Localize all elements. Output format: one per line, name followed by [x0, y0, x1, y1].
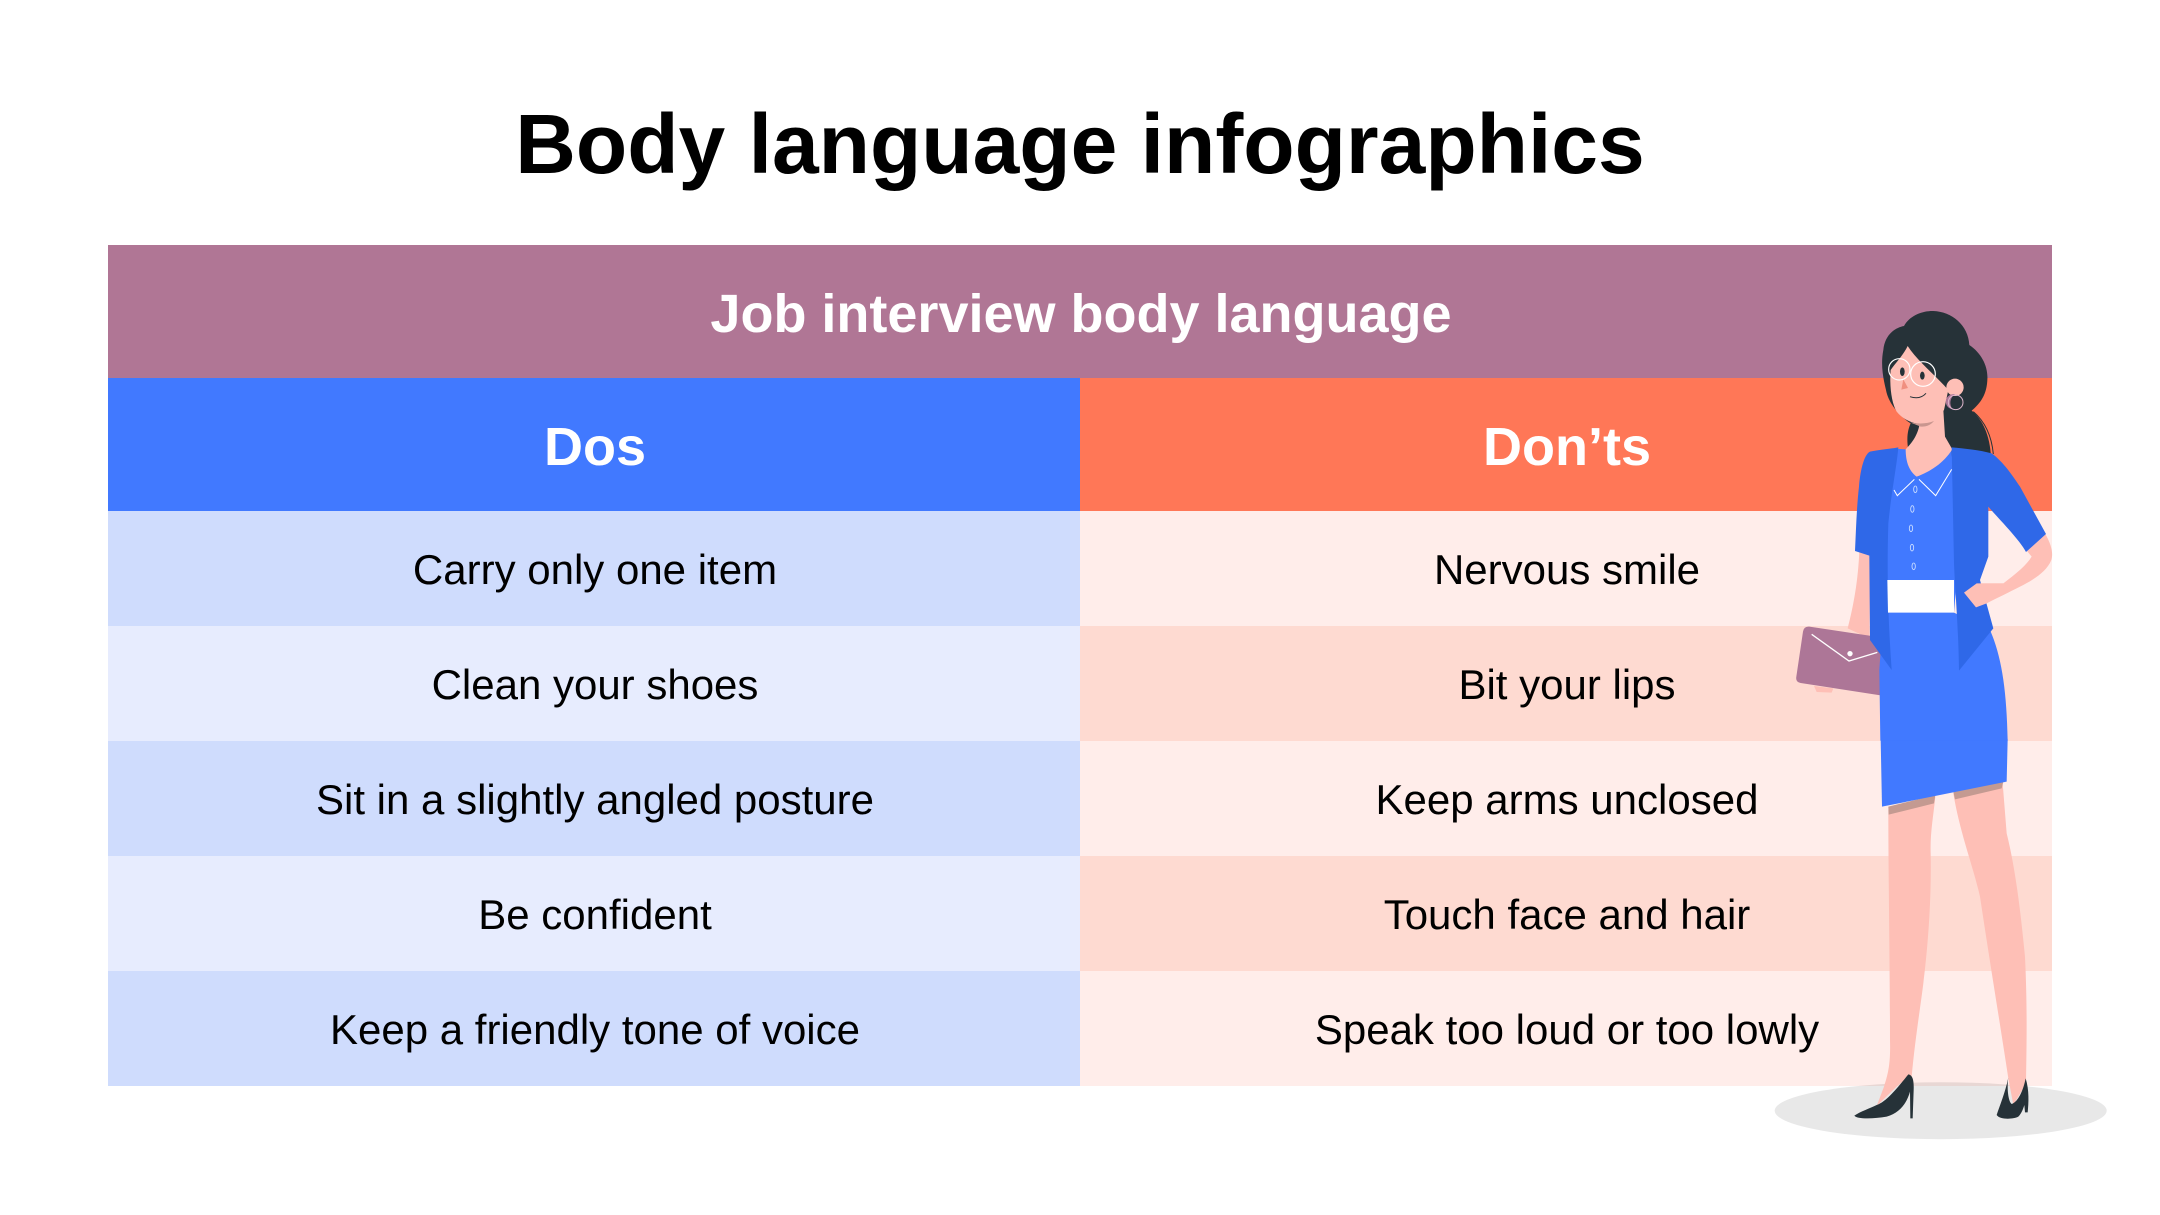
dos row 3: Sit in a slightly angled posture — [316, 776, 874, 823]
left arm — [1848, 550, 1871, 638]
belt — [1887, 580, 1954, 613]
don'ts row 5: Speak too loud or too lowly — [1315, 1006, 1819, 1053]
dos row 2: Clean your shoes — [432, 661, 758, 708]
dos heading — [108, 378, 1080, 511]
ground shadow — [1775, 1082, 2107, 1139]
table heading: Job interview body language — [710, 284, 1452, 344]
skirt hem — [1881, 739, 2008, 807]
don'ts row 2: Bit your lips — [1458, 661, 1676, 708]
collar — [1894, 469, 1952, 496]
nose — [1901, 379, 1908, 390]
don'ts row 5 — [1080, 971, 2052, 1086]
left jacket panel — [1855, 447, 1898, 670]
right leg — [1953, 783, 2027, 1105]
earring — [1946, 394, 1963, 410]
panel: dos column — [108, 378, 1080, 1086]
left leg — [1877, 797, 1935, 1106]
don'ts row 1 — [1080, 511, 2052, 626]
dos row 2 — [108, 626, 1080, 741]
don'ts heading: Don’ts — [1483, 417, 1651, 477]
don'ts row 4 — [1080, 856, 2052, 971]
title: Body language infographics — [515, 96, 1645, 190]
don'ts row 3 — [1080, 741, 2052, 856]
don'ts row 4: Touch face and hair — [1384, 891, 1750, 938]
ear — [1946, 379, 1964, 396]
panel: don'ts column — [1080, 378, 2052, 1086]
buttons — [1909, 486, 1917, 570]
don'ts row 1: Nervous smile — [1434, 546, 1700, 593]
skirt shadow on legs — [1888, 782, 2003, 815]
face — [1890, 346, 1948, 424]
eyes — [1900, 367, 1925, 380]
upper body — [1796, 311, 2052, 741]
mouth — [1910, 393, 1926, 398]
left shoe — [1854, 1074, 1914, 1118]
neck shadow — [1910, 421, 1934, 427]
lower body — [1854, 739, 2028, 1119]
don'ts row 2 — [1080, 626, 2052, 741]
dos row 3 — [108, 741, 1080, 856]
right arm — [1964, 533, 2052, 607]
ponytail strand — [1973, 412, 1993, 454]
clutch bag — [1796, 627, 1881, 695]
dos heading: Dos — [544, 417, 646, 477]
don'ts row 3: Keep arms unclosed — [1376, 776, 1758, 823]
dos row 5 — [108, 971, 1080, 1086]
table heading — [108, 245, 2052, 378]
dos row 1: Carry only one item — [413, 546, 777, 593]
dos row 1 — [108, 511, 1080, 626]
panel: job interview table — [108, 245, 2052, 1086]
right shoe — [1997, 1078, 2028, 1119]
dos row 5: Keep a friendly tone of voice — [330, 1006, 860, 1053]
dos row 4 — [108, 856, 1080, 971]
neck and chest — [1906, 410, 1952, 477]
right jacket panel and sleeve — [1952, 447, 2046, 671]
hair — [1882, 311, 1991, 457]
glasses — [1889, 359, 1935, 386]
don'ts heading — [1080, 378, 2052, 511]
hand at hip — [1964, 583, 2003, 607]
dress — [1879, 448, 2008, 741]
dos row 4: Be confident — [478, 891, 712, 938]
